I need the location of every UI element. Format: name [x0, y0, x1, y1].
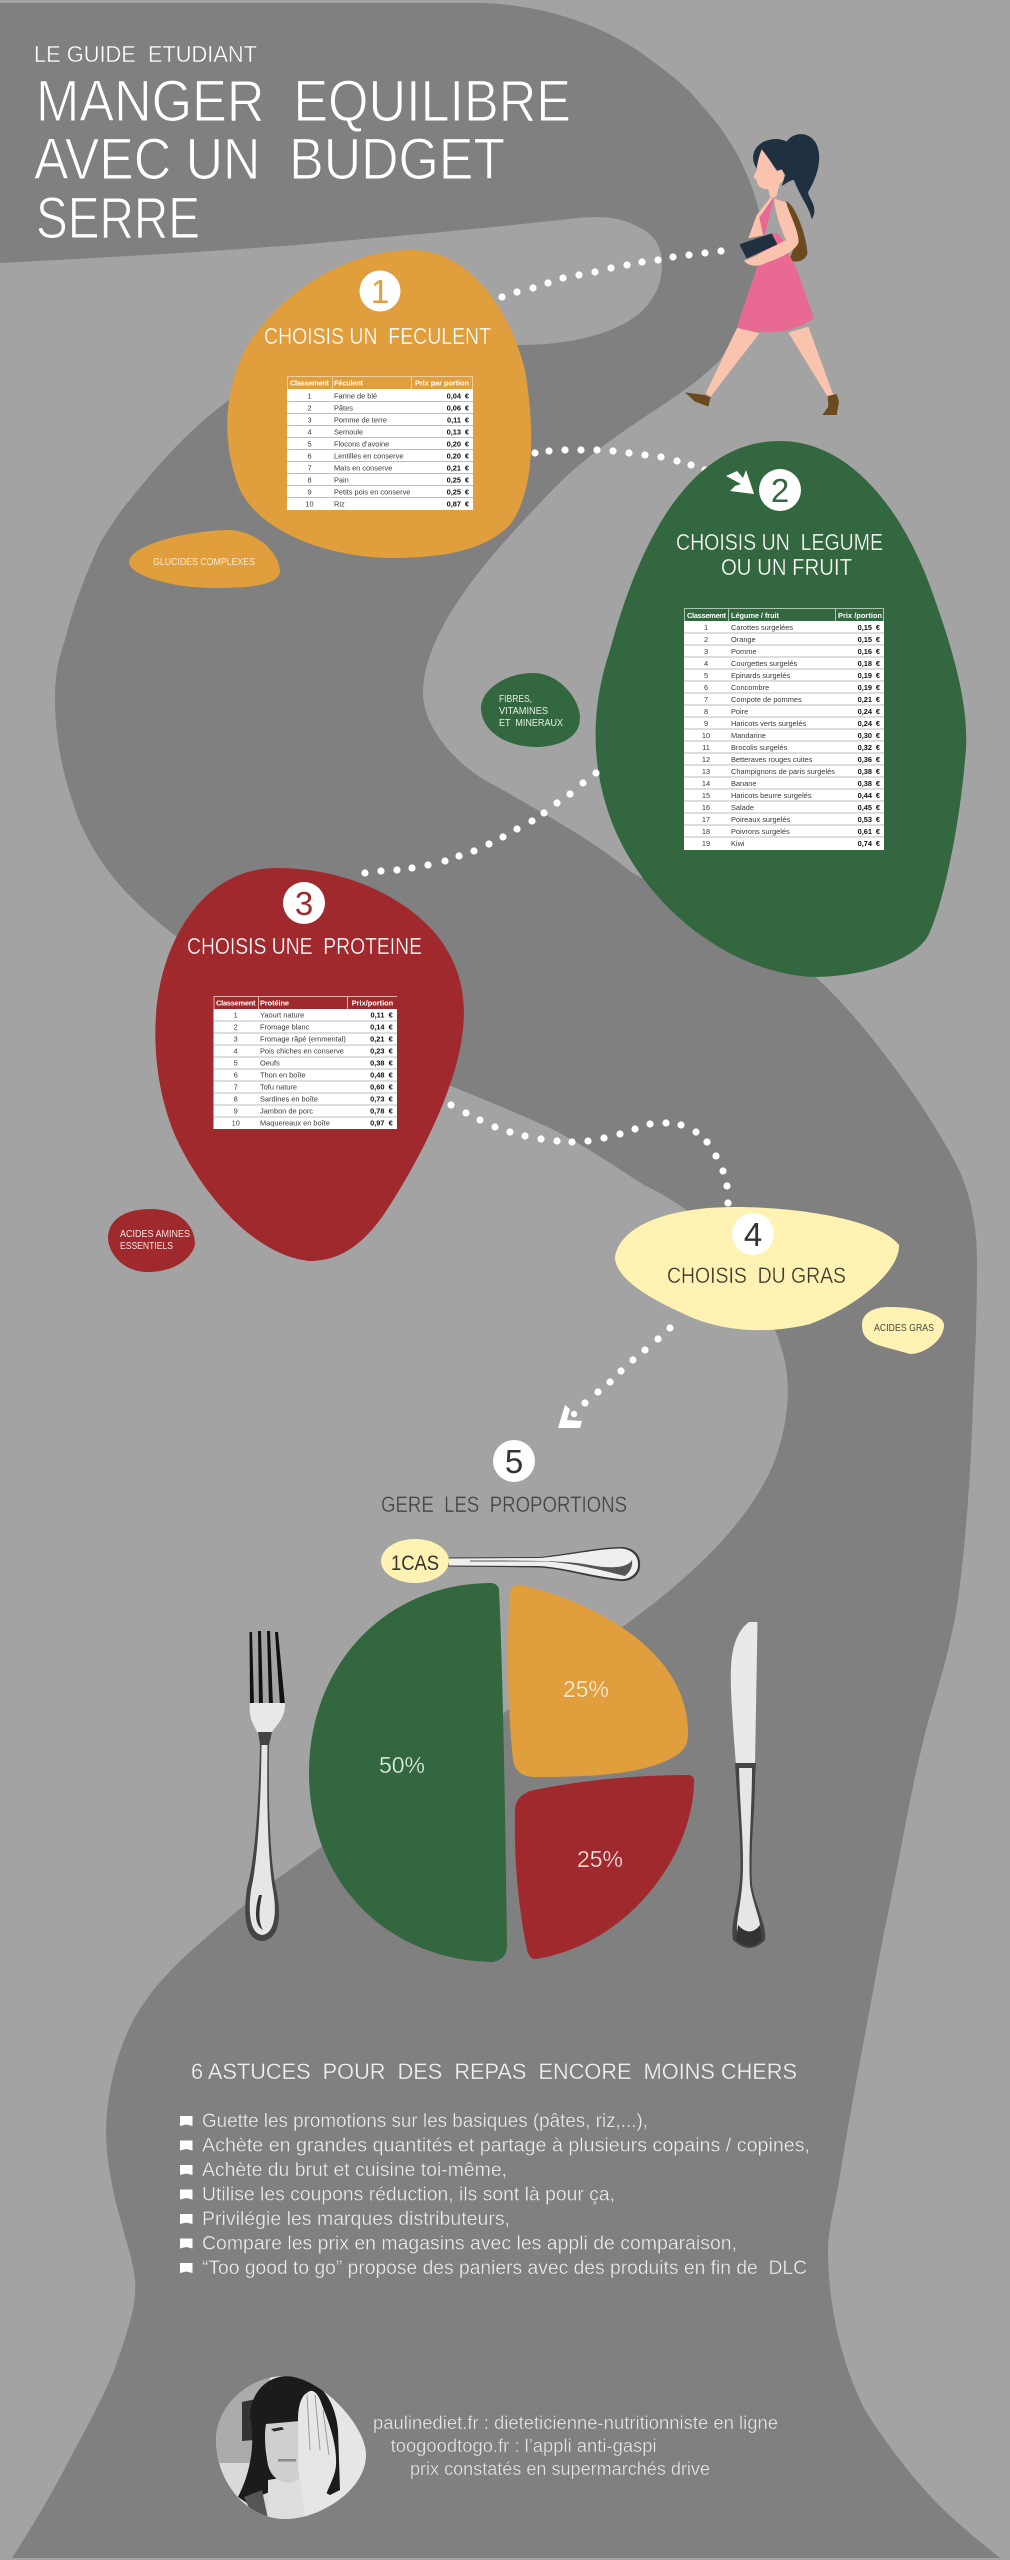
table: feculents: € — [465, 427, 469, 436]
panel: step 2 legume ou fruit — [596, 441, 966, 977]
number 2 — [759, 469, 801, 511]
text block: credits: prix constatés en supermarchés drive — [410, 2459, 710, 2479]
table: legumes et fruits: Poivrons surgelés — [731, 827, 790, 836]
table: legumes et fruits: Prix /portion — [838, 611, 882, 620]
table: proteines: Jambon de porc — [260, 1106, 313, 1116]
table: proteines: 9 — [234, 1106, 238, 1116]
title block: AVEC UN BUDGET — [34, 127, 505, 192]
table: feculents: Lentilles en conserve — [334, 451, 403, 460]
number 1: 1 — [371, 273, 389, 310]
bullet icons — [180, 2116, 192, 2273]
table: legumes et fruits: 2 — [704, 635, 708, 644]
table: feculents — [287, 376, 473, 510]
number 4 — [732, 1213, 774, 1255]
table: legumes et fruits: 0,38 — [858, 779, 872, 788]
number 5 — [493, 1440, 535, 1482]
callout: glucides complexes — [129, 530, 280, 588]
table: legumes et fruits: Banane — [731, 779, 756, 788]
table: legumes et fruits: 0,16 — [858, 647, 872, 656]
table: legumes et fruits: 0,15 — [858, 635, 872, 644]
heading: CHOISIS UNE PROTEINE — [187, 933, 422, 959]
table: legumes et fruits: Salade — [731, 803, 754, 812]
heading: CHOISIS UN FECULENT — [264, 323, 491, 349]
table: proteines: Maquereaux en boîte — [260, 1118, 330, 1128]
torso skin — [748, 187, 777, 238]
spoon: 1 CAS — [381, 1539, 640, 1583]
table: legumes et fruits — [684, 608, 884, 850]
table: legumes et fruits: € — [876, 815, 880, 824]
table: proteines: € — [389, 1070, 393, 1080]
number 3: 3 — [295, 885, 313, 922]
table: legumes et fruits: Mandarine — [731, 731, 766, 740]
dotted path: step 2 to step 3 — [361, 769, 600, 877]
dotted path: girl to step 1 — [498, 247, 725, 301]
table: feculents: Classement — [290, 378, 330, 388]
table: feculents: Pâtes — [334, 403, 353, 412]
table: feculents: 8 — [307, 475, 312, 484]
table: legumes et fruits: 0,61 — [858, 827, 872, 836]
table: proteines: 0,21 — [370, 1034, 384, 1044]
text block: list of tips: “Too good to go” propose des paniers avec des produits en fin de DLC — [202, 2258, 807, 2279]
table: legumes et fruits: 3 — [704, 647, 708, 656]
table: proteines: € — [389, 1022, 393, 1032]
table: legumes et fruits: 0,18 — [858, 659, 872, 668]
table: feculents: Riz — [334, 499, 345, 508]
table: proteines: Classement — [216, 998, 256, 1008]
dotted path: step 1 to step 2 — [531, 446, 721, 479]
text block: list of tips: Utilise les coupons réduction, ils sont là pour ça, — [202, 2184, 615, 2206]
table: legumes et fruits: 0,19 — [858, 671, 872, 680]
table: proteines: 0,48 — [370, 1070, 384, 1080]
heading: CHOISIS UN LEGUME — [676, 529, 883, 555]
table: legumes et fruits: Haricots verts surgelés — [731, 719, 806, 728]
table: proteines: € — [389, 1058, 393, 1068]
table: proteines: 0,23 — [370, 1046, 384, 1056]
heading: 6 astuces: 6 ASTUCES POUR DES REPAS ENCORE MOINS CHERS — [191, 2059, 797, 2084]
panel: step 4 gras — [615, 1207, 899, 1330]
icon: fork — [245, 1631, 285, 1941]
table: proteines: 0,60 — [370, 1082, 384, 1092]
table: feculents: Maïs en conserve — [334, 463, 392, 472]
table: feculents: € — [465, 475, 469, 484]
table: proteines: 7 — [234, 1082, 238, 1092]
table: proteines: 8 — [234, 1094, 238, 1104]
table: feculents: 5 — [307, 439, 312, 448]
table: legumes et fruits: Classement — [687, 611, 727, 620]
table: feculents: 0,87 — [447, 499, 461, 508]
callout: acides gras: ACIDES GRAS — [874, 1323, 934, 1334]
heading — [676, 529, 883, 580]
title block: LE GUIDE ETUDIANT — [34, 41, 257, 67]
shoes — [685, 392, 839, 415]
table: feculents: 0,11 — [447, 415, 461, 424]
number 4: 4 — [744, 1216, 762, 1253]
table: feculents: 0,21 — [447, 463, 461, 472]
table: legumes et fruits: € — [876, 803, 880, 812]
table: legumes et fruits: 16 — [702, 803, 710, 812]
text block: list of tips — [180, 2111, 810, 2279]
table: legumes et fruits: € — [876, 719, 880, 728]
dotted path: step 3 to step 4 — [447, 1101, 732, 1207]
table: legumes et fruits: 0,45 — [858, 803, 872, 812]
table: feculents: 0,25 — [447, 487, 461, 496]
table: legumes et fruits: 7 — [704, 695, 708, 704]
table: legumes et fruits: 0,53 — [858, 815, 872, 824]
number 5: 5 — [505, 1443, 523, 1480]
table: legumes et fruits: 0,32 — [858, 743, 872, 752]
table: legumes et fruits: Poire — [731, 707, 748, 716]
callout: acides amines essentiels: ACIDES AMINES — [120, 1229, 190, 1240]
table: proteines: Prix/portion — [352, 998, 394, 1008]
table: proteines: € — [389, 1046, 393, 1056]
table: proteines: 6 — [234, 1070, 238, 1080]
table: legumes et fruits: Brocolis surgelés — [731, 743, 788, 752]
table: feculents: Flocons d'avoine — [334, 439, 389, 448]
table: legumes et fruits: 4 — [704, 659, 708, 668]
callout: fibres vitamines et mineraux: VITAMINES — [499, 705, 548, 717]
table: proteines: € — [389, 1094, 393, 1104]
book — [739, 233, 777, 258]
step 5 heading: GERE LES PROPORTIONS — [381, 1492, 627, 1517]
table: legumes et fruits: Haricots beurre surgelés — [731, 791, 812, 800]
table: legumes et fruits: € — [876, 767, 880, 776]
table: legumes et fruits: 0,24 — [858, 707, 873, 716]
callout: fibres vitamines et mineraux: FIBRES, — [499, 693, 532, 705]
table: feculents: 0,20 — [447, 439, 461, 448]
table: feculents: 10 — [305, 499, 314, 508]
table: feculents: 9 — [307, 487, 312, 496]
text block: list of tips: Compare les prix en magasins avec les appli de comparaison, — [202, 2234, 737, 2254]
table: legumes et fruits: 12 — [702, 755, 710, 764]
table: proteines: 0,11 — [371, 1010, 384, 1020]
text block: credits: paulinediet.fr : dieteticienne-nutritionniste en ligne — [373, 2413, 778, 2433]
table: feculents: Prix par portion — [415, 378, 469, 388]
table: legumes et fruits: 0,74 — [858, 839, 873, 848]
plate: 25% — [515, 1775, 694, 1959]
table: feculents: 2 — [307, 403, 312, 412]
text block: credits — [373, 2413, 778, 2479]
callout: acides gras — [862, 1307, 944, 1354]
table: legumes et fruits: Poireaux surgelés — [731, 815, 790, 824]
illustration: walking girl — [685, 134, 839, 415]
table: proteines: € — [389, 1034, 393, 1044]
table: legumes et fruits: 5 — [704, 671, 708, 680]
number 2: 2 — [771, 472, 789, 509]
table: legumes et fruits: Betteraves rouges cuites — [731, 755, 813, 764]
plate: 25% — [508, 1585, 688, 1777]
plate: 25%: 25% — [577, 1846, 623, 1872]
chart: plate proportions — [309, 1583, 694, 1962]
table: legumes et fruits: Carottes surgelées — [731, 623, 793, 632]
text block: list of tips: Guette les promotions sur les basiques (pâtes, riz,...), — [202, 2111, 648, 2132]
table: proteines: Pois chiches en conserve — [260, 1046, 344, 1056]
table: legumes et fruits: € — [876, 623, 880, 632]
table: legumes et fruits: 0,24 — [858, 719, 873, 728]
table: proteines: 0,97 — [370, 1118, 384, 1128]
table: legumes et fruits: 0,36 — [858, 755, 872, 764]
table: legumes et fruits: € — [876, 683, 880, 692]
table: legumes et fruits: 14 — [702, 779, 710, 788]
table: legumes et fruits: € — [876, 695, 880, 704]
number 3 — [283, 882, 325, 924]
table: proteines: 0,73 — [370, 1094, 384, 1104]
dress — [737, 197, 814, 332]
spoon: 1 CAS: 1CAS — [391, 1552, 439, 1575]
table: proteines: € — [389, 1106, 393, 1116]
table: legumes et fruits: € — [876, 671, 880, 680]
table: proteines: Oeufs — [260, 1058, 280, 1068]
table: legumes et fruits: 1 — [704, 623, 708, 632]
panel: step 3 proteine — [155, 868, 464, 1261]
face — [753, 149, 784, 197]
table: legumes et fruits: 15 — [702, 791, 710, 800]
table: proteines: 1 — [234, 1010, 238, 1020]
table: legumes et fruits: € — [876, 707, 880, 716]
table: feculents: € — [465, 415, 469, 424]
dotted arrow: step 4 to step 5 — [558, 1324, 674, 1428]
table: proteines: Fromage râpé (emmental) — [260, 1034, 346, 1044]
callout: glucides complexes: GLUCIDES COMPLEXES — [153, 556, 255, 568]
text block: list of tips: Achète en grandes quantités et partage à plusieurs copains / copines, — [202, 2136, 810, 2156]
table: proteines: Protéine — [260, 998, 289, 1008]
table: legumes et fruits: 0,30 — [858, 731, 872, 740]
table: feculents: € — [465, 391, 469, 400]
table: proteines: € — [389, 1010, 393, 1020]
table: feculents: 0,04 — [447, 391, 462, 400]
text block: list of tips: Achète du brut et cuisine toi-même, — [202, 2160, 507, 2181]
table: legumes et fruits: € — [876, 827, 880, 836]
callout: acides amines essentiels — [108, 1209, 195, 1272]
plate: 25%: 25% — [563, 1676, 609, 1702]
table: legumes et fruits: 0,38 — [858, 767, 872, 776]
table: feculents: € — [465, 487, 469, 496]
title block — [34, 41, 571, 251]
table: proteines: 2 — [234, 1022, 238, 1032]
callout: fibres vitamines et mineraux: ET MINERAUX — [499, 717, 563, 729]
table: legumes et fruits: 0,15 — [858, 623, 872, 632]
table: feculents: 0,06 — [447, 403, 461, 412]
table: legumes et fruits: € — [876, 839, 880, 848]
table: proteines: Thon en boîte — [260, 1070, 306, 1080]
table: legumes et fruits: 0,19 — [858, 683, 872, 692]
table: feculents: 0,13 — [447, 427, 461, 436]
table: feculents: Semoule — [334, 427, 363, 436]
table: legumes et fruits: € — [876, 647, 880, 656]
table: legumes et fruits: 11 — [702, 743, 710, 752]
table: proteines: 4 — [234, 1046, 238, 1056]
table: legumes et fruits: 9 — [704, 719, 708, 728]
table: proteines: 10 — [232, 1118, 240, 1128]
table: feculents: 3 — [307, 415, 312, 424]
table: legumes et fruits: Kiwi — [731, 839, 745, 848]
table: legumes et fruits: Orange — [731, 635, 756, 644]
table: feculents: € — [465, 403, 469, 412]
plate: 50% — [309, 1583, 507, 1962]
table: legumes et fruits: Concombre — [731, 683, 769, 692]
text block: credits: toogoodtogo.fr : l’appli anti-gaspi — [391, 2436, 657, 2456]
table: legumes et fruits: Compote de pommes — [731, 695, 802, 704]
table: feculents: 7 — [307, 463, 312, 472]
legs — [706, 327, 833, 397]
table: feculents: € — [465, 463, 469, 472]
table: legumes et fruits: 0,44 — [858, 791, 873, 800]
icon: knife — [731, 1622, 765, 1948]
table: feculents: € — [465, 439, 469, 448]
table: feculents: 0,20 — [447, 451, 461, 460]
table: legumes et fruits: 17 — [702, 815, 710, 824]
table: proteines: 3 — [234, 1034, 238, 1044]
table: proteines: Tofu nature — [260, 1082, 297, 1092]
arm — [744, 198, 799, 266]
table: legumes et fruits: Courgettes surgelés — [731, 659, 797, 668]
title block: MANGER EQUILIBRE — [36, 69, 571, 134]
table: feculents: Pain — [334, 475, 349, 484]
table: feculents: Farine de blé — [334, 391, 377, 400]
table: legumes et fruits: 8 — [704, 707, 708, 716]
table: feculents: Petits pois en conserve — [334, 487, 410, 496]
table: feculents: 0,25 — [447, 475, 461, 484]
number 1 — [360, 270, 400, 312]
table: legumes et fruits: € — [876, 755, 880, 764]
table: legumes et fruits: € — [876, 779, 880, 788]
table: proteines: Sardines en boîte — [260, 1094, 318, 1104]
table: proteines: Fromage blanc — [260, 1022, 310, 1032]
callout: acides amines essentiels: ESSENTIELS — [120, 1241, 173, 1252]
text block: list of tips: Privilégie les marques distributeurs, — [202, 2209, 510, 2230]
heading: OU UN FRUIT — [721, 554, 852, 580]
portrait photo — [216, 2376, 366, 2519]
table: legumes et fruits: 10 — [702, 731, 710, 740]
table: proteines: € — [389, 1082, 393, 1092]
table: feculents: 6 — [307, 451, 312, 460]
table: legumes et fruits: 18 — [702, 827, 710, 836]
table: legumes et fruits: € — [876, 659, 880, 668]
callout: fibres vitamines et mineraux — [481, 673, 580, 747]
table: proteines: 0,38 — [370, 1058, 384, 1068]
table: proteines: Yaourt nature — [260, 1010, 304, 1020]
heading: CHOISIS DU GRAS — [667, 1263, 846, 1288]
step 5 heading — [381, 1440, 627, 1517]
table: legumes et fruits: € — [876, 635, 880, 644]
table: feculents: € — [465, 499, 469, 508]
arrow — [726, 470, 754, 494]
table: proteines: 0,78 — [370, 1106, 384, 1116]
table: legumes et fruits: 0,21 — [858, 695, 872, 704]
table: proteines: € — [389, 1118, 393, 1128]
table: legumes et fruits: 13 — [702, 767, 710, 776]
plate: 50%: 50% — [379, 1752, 425, 1778]
table: legumes et fruits: 6 — [704, 683, 708, 692]
table: legumes et fruits: Pomme — [731, 647, 756, 656]
panel: step 1 feculent — [227, 250, 531, 558]
table: proteines: 5 — [234, 1058, 238, 1068]
table: feculents: Pomme de terre — [334, 415, 387, 424]
table: feculents: 1 — [307, 391, 312, 400]
title block: SERRE — [36, 186, 200, 251]
table: proteines: 0,14 — [370, 1022, 385, 1032]
hair — [753, 134, 819, 219]
table: proteines — [214, 996, 397, 1129]
table: legumes et fruits: Epinards surgelés — [731, 671, 790, 680]
table: legumes et fruits: Légume / fruit — [731, 611, 780, 620]
bag — [786, 201, 807, 262]
table: legumes et fruits: Champignons de paris surgelés — [731, 767, 835, 776]
table: feculents: € — [465, 451, 469, 460]
table: feculents: 4 — [307, 427, 312, 436]
table: legumes et fruits: € — [876, 743, 880, 752]
table: legumes et fruits: 19 — [702, 839, 710, 848]
table: legumes et fruits: € — [876, 791, 880, 800]
table: feculents: Féculent — [334, 378, 364, 388]
table: legumes et fruits: € — [876, 731, 880, 740]
